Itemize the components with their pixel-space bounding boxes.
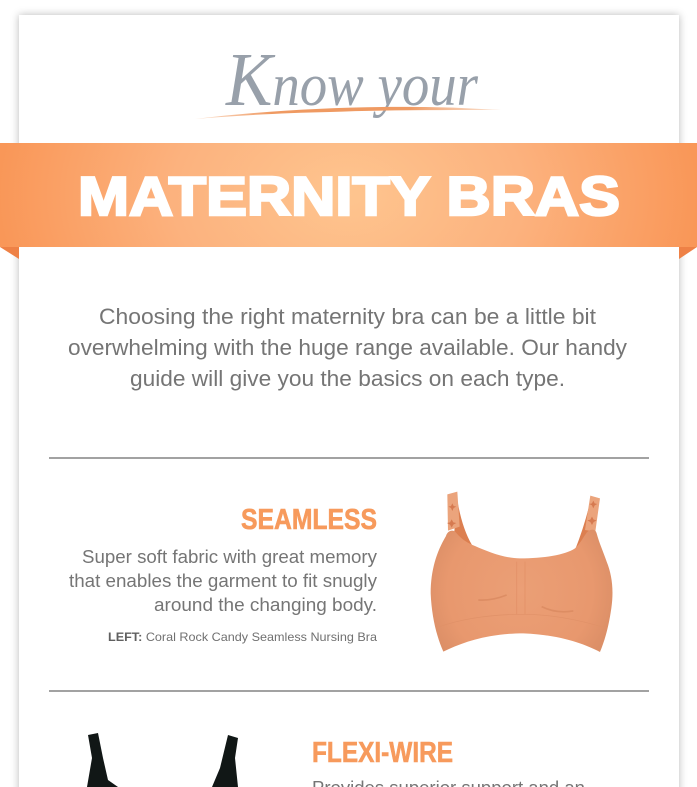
caption: seamless: LEFT: Coral Rock Candy Seamless Nursing Bra [108,630,377,644]
swoosh underline [195,107,501,119]
banner ribbon [0,143,697,259]
heading: Seamless: SEAMLESS [241,504,377,536]
heading: Flexi-wire: FLEXI-WIRE [312,737,453,769]
banner band [0,143,697,247]
image: black flexi-wire bra straps [87,733,238,787]
intro paragraph [68,304,627,391]
section: flexi-wire [87,733,585,787]
heading: Maternity Bras: MATERNITY BRAS [78,165,620,227]
description: seamless: that enables the garment to fit snugly [69,571,377,591]
intro paragraph: overwhelming with the huge range available. Our handy [68,335,627,360]
intro paragraph: Choosing the right maternity bra can be a little bit [99,304,596,329]
left ribbon fold [0,247,19,259]
right ribbon fold [679,247,697,259]
image: coral seamless bra [431,492,612,652]
section: seamless [69,492,612,652]
description: seamless: Super soft fabric with great memory [82,547,377,567]
intro paragraph: guide will give you the basics on each type. [130,366,565,391]
description: seamless [69,547,377,615]
title script: Know your: Know your [225,38,479,122]
description: seamless: around the changing body. [154,595,377,615]
